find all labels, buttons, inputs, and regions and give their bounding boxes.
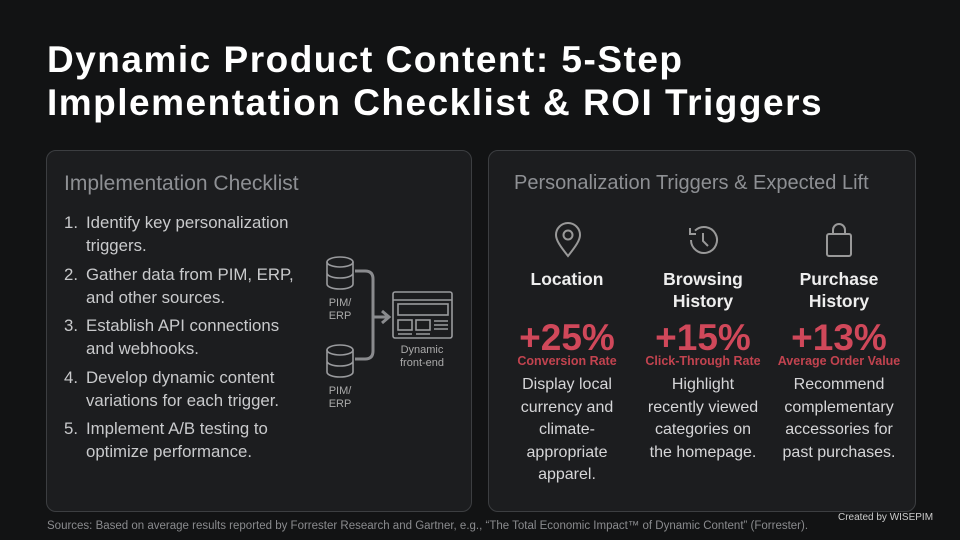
diagram: data flow: PIM/ [329, 297, 352, 309]
title [47, 39, 823, 123]
column: location [517, 269, 617, 483]
checklist items: optimize performance. [86, 442, 252, 461]
title: Implementation Checklist & ROI Triggers [47, 82, 823, 123]
column: browsing: +15% [655, 317, 751, 358]
diagram: data flow: ERP [329, 398, 351, 410]
diagram: data flow: PIM/ [329, 385, 352, 397]
column: browsing: History [673, 291, 733, 311]
checklist items: Identify key personalization [86, 213, 288, 232]
column: purchase: Recommend complementary accessories for past purchases. [783, 376, 895, 460]
checklist items [64, 213, 294, 461]
icon: history [689, 226, 718, 254]
column: location: Display local currency and climate-appropriate apparel. [521, 376, 613, 483]
checklist items: Gather data from PIM, ERP, [86, 265, 294, 284]
column: browsing: Highlight recently viewed categories on the homepage. [648, 376, 758, 460]
panel: triggers [488, 150, 916, 512]
heading: checklist: Implementation Checklist [64, 172, 299, 195]
column: purchase: +13% [791, 317, 887, 358]
icon: bag [826, 223, 852, 257]
column: location: Conversion Rate [517, 354, 617, 368]
column: location: +25% [519, 317, 615, 358]
column: location: Location [531, 269, 603, 289]
checklist items: and other sources. [86, 288, 225, 307]
column: purchase: Average Order Value [778, 354, 900, 368]
checklist items: 4. [64, 368, 78, 387]
diagram: data flow [326, 256, 453, 410]
column: purchase: History [809, 291, 869, 311]
checklist items: 1. [64, 213, 78, 232]
icon: location [555, 222, 581, 258]
diagram: data flow: ERP [329, 310, 351, 322]
column: purchase: Purchase [800, 269, 878, 289]
diagram: data flow: Dynamic [401, 344, 444, 356]
checklist items: variations for each trigger. [86, 391, 279, 410]
panel: checklist [46, 150, 472, 512]
credit: Created by WISEPIM [838, 512, 933, 523]
column: purchase [778, 269, 900, 460]
checklist items: Develop dynamic content [86, 368, 274, 387]
title: Dynamic Product Content: 5-Step [47, 39, 684, 80]
diagram: data flow: front-end [400, 357, 444, 369]
checklist items: 3. [64, 316, 78, 335]
checklist items: and webhooks. [86, 339, 199, 358]
column: browsing: Browsing [663, 269, 743, 289]
heading: triggers: Personalization Triggers & Expected Lift [514, 172, 869, 194]
sources: Sources: Based on average results reported by Forrester Research and Gartner, e.g., “The Total Economic Impact™ of Dynamic Content” (Forrester). [47, 520, 808, 532]
checklist items: Establish API connections [86, 316, 279, 335]
checklist items: 2. [64, 265, 78, 284]
column: browsing [645, 269, 761, 460]
column: browsing: Click-Through Rate [645, 354, 761, 368]
checklist items: triggers. [86, 236, 147, 255]
checklist items: 5. [64, 419, 78, 438]
checklist items: Implement A/B testing to [86, 419, 268, 438]
